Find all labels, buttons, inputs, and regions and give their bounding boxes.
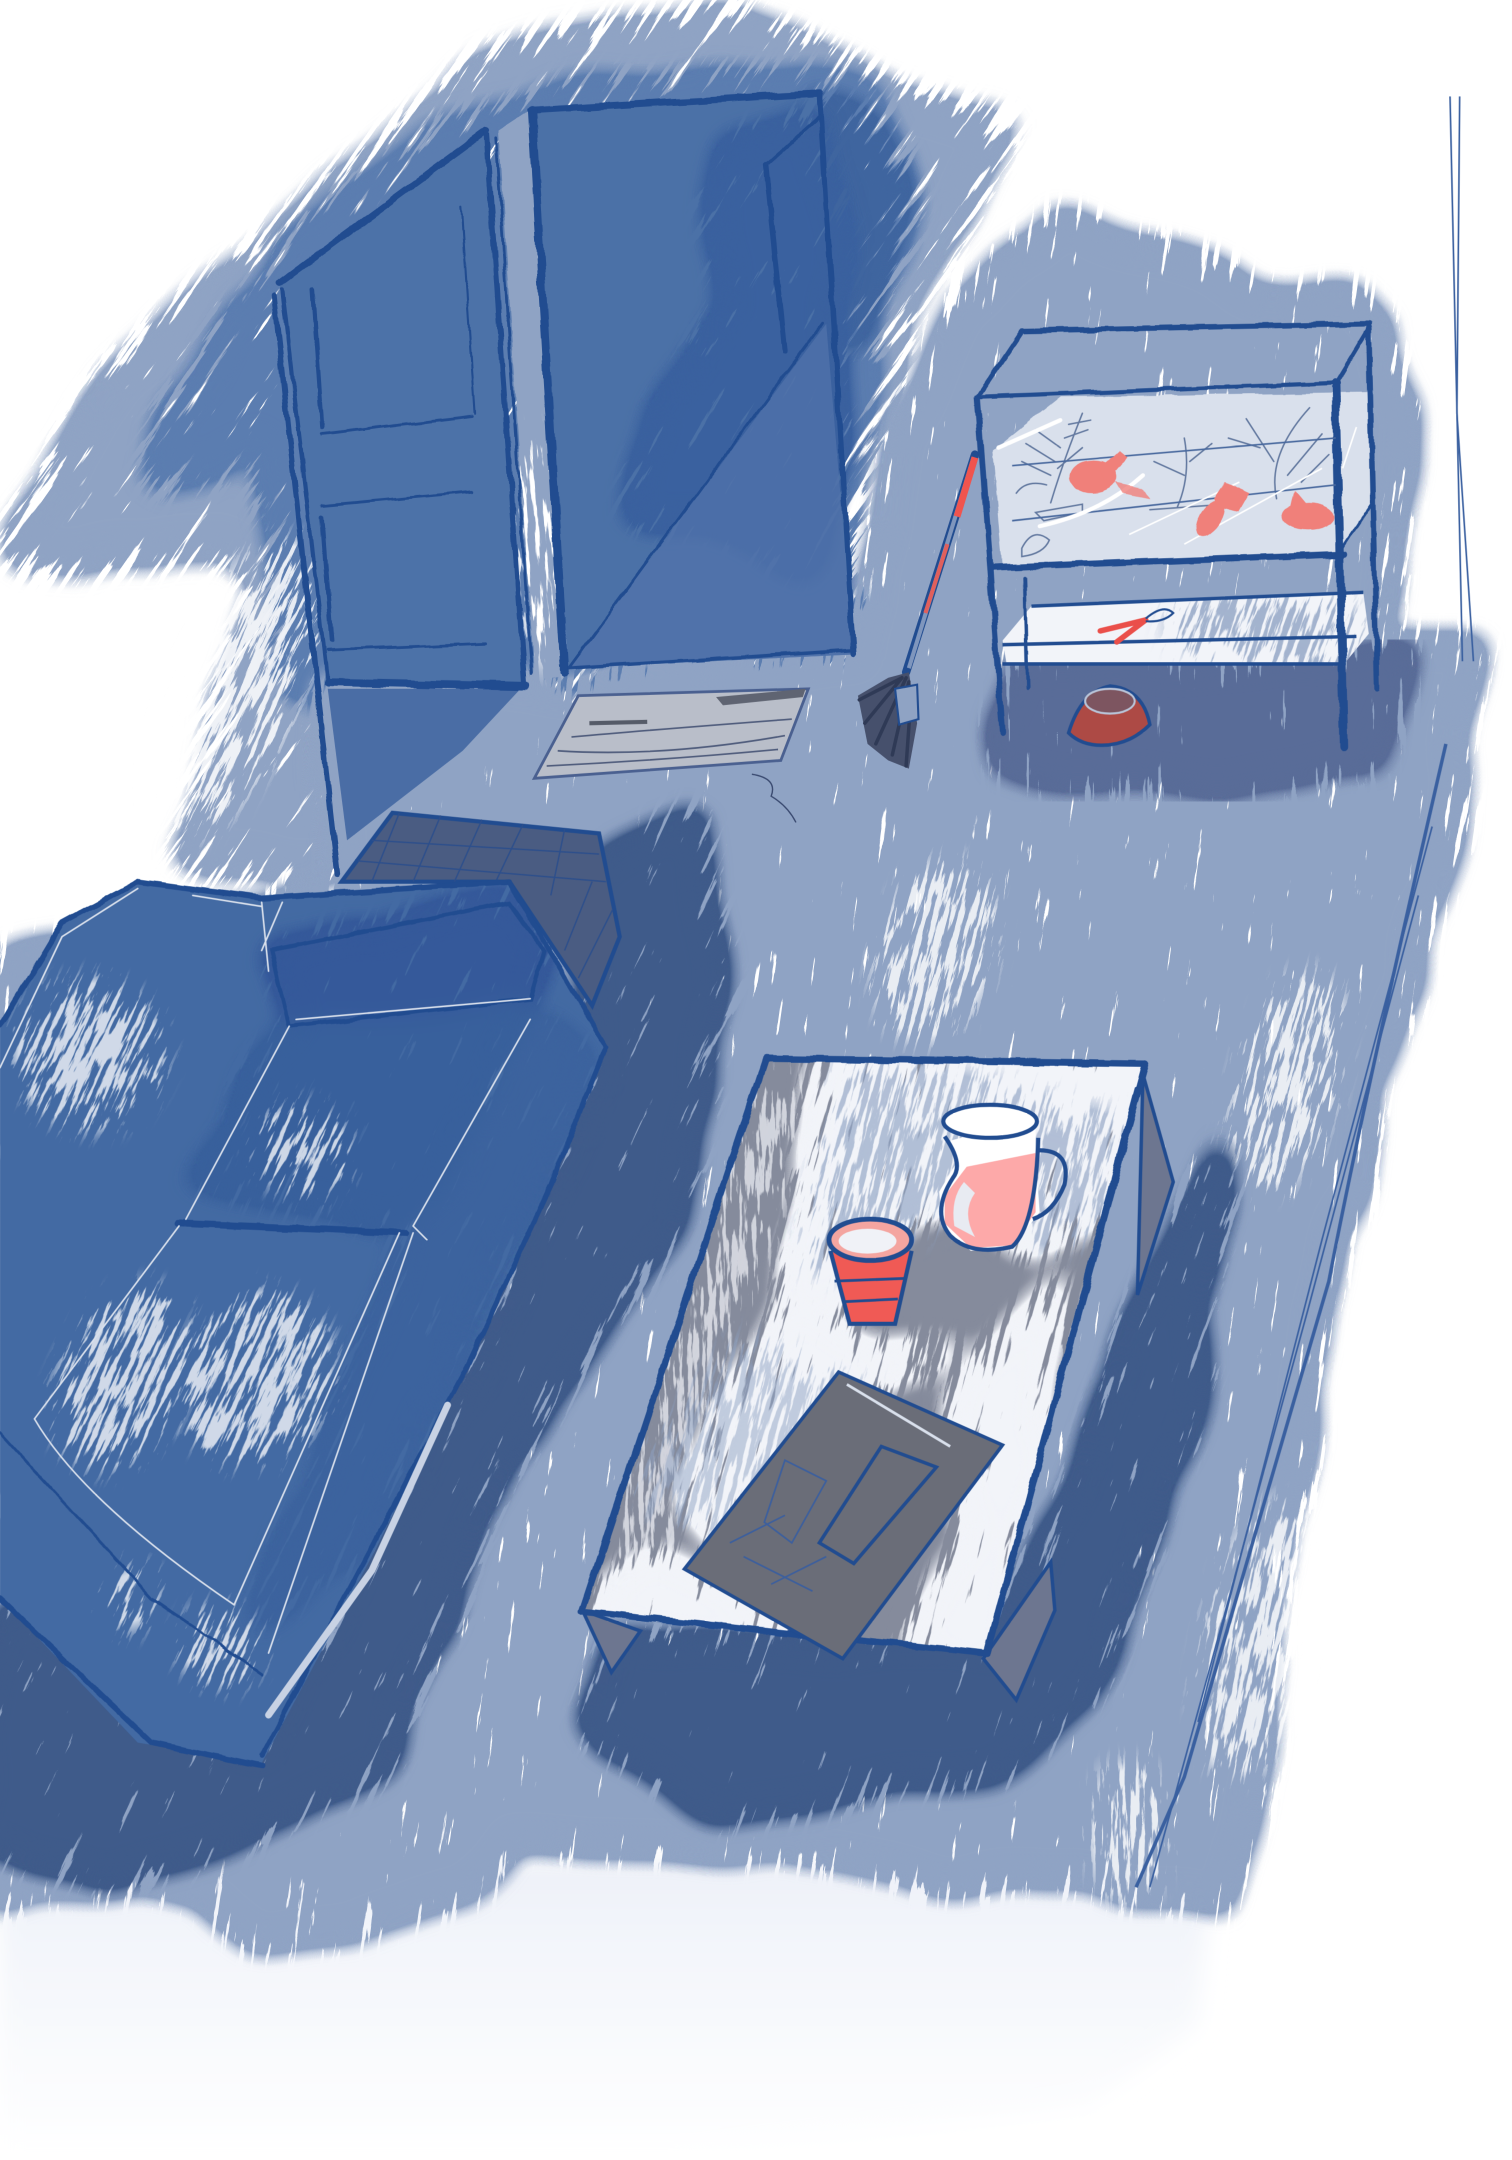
newspaper on the table bbox=[684, 1372, 1002, 1659]
doormat bbox=[534, 689, 808, 822]
right wall edge lines bbox=[1136, 96, 1473, 1887]
coffee table bbox=[577, 1054, 1176, 1703]
floor chalk gaps: white streak patches bbox=[872, 859, 1349, 1894]
table top bbox=[582, 1058, 1146, 1653]
shadow of the table bbox=[377, 942, 1433, 2013]
sofa white contour lines bbox=[0, 889, 530, 1653]
table left strip chalk speckle bbox=[613, 1088, 806, 1557]
table legs bbox=[1137, 1074, 1173, 1295]
sofa outline bbox=[0, 882, 606, 1766]
crate behind the sofa bbox=[342, 813, 620, 1006]
shadow of the sofa bbox=[0, 536, 1119, 2160]
table blue pencil strokes bbox=[795, 1055, 1145, 1347]
sofa chalk highlights bbox=[5, 970, 352, 1685]
left wall chalk streaks bbox=[125, 530, 343, 847]
door shadow on the floor bbox=[328, 689, 521, 840]
aquarium lower shelf bbox=[1002, 590, 1369, 666]
wall wash: dark patch right of the door bbox=[696, 54, 1018, 386]
doormat cord bbox=[752, 774, 796, 822]
broom bbox=[858, 455, 975, 769]
wall wash: mid blue brush area bbox=[0, 0, 1197, 1043]
sofa bbox=[0, 749, 869, 1779]
left door bbox=[274, 131, 532, 875]
background wash at the bottom bbox=[0, 1860, 1212, 2160]
pet bowl bbox=[1069, 686, 1150, 745]
pitcher bbox=[939, 1105, 1066, 1251]
aquarium plants bbox=[1016, 408, 1329, 557]
aquarium on stand bbox=[978, 324, 1384, 747]
goldfish bbox=[1070, 450, 1334, 541]
right door bbox=[433, 22, 1041, 672]
sofa shading bbox=[189, 886, 594, 1622]
aquarium frame bbox=[978, 324, 1377, 747]
pruning shears bbox=[1100, 620, 1146, 642]
shadow under the aquarium bbox=[998, 658, 1418, 782]
red cup bbox=[829, 1219, 912, 1324]
wall wash: light brush area bbox=[0, 0, 1412, 1348]
aquarium glass reflections bbox=[998, 420, 1143, 526]
gap between the doors bbox=[498, 110, 567, 682]
aquarium water bbox=[993, 393, 1373, 565]
